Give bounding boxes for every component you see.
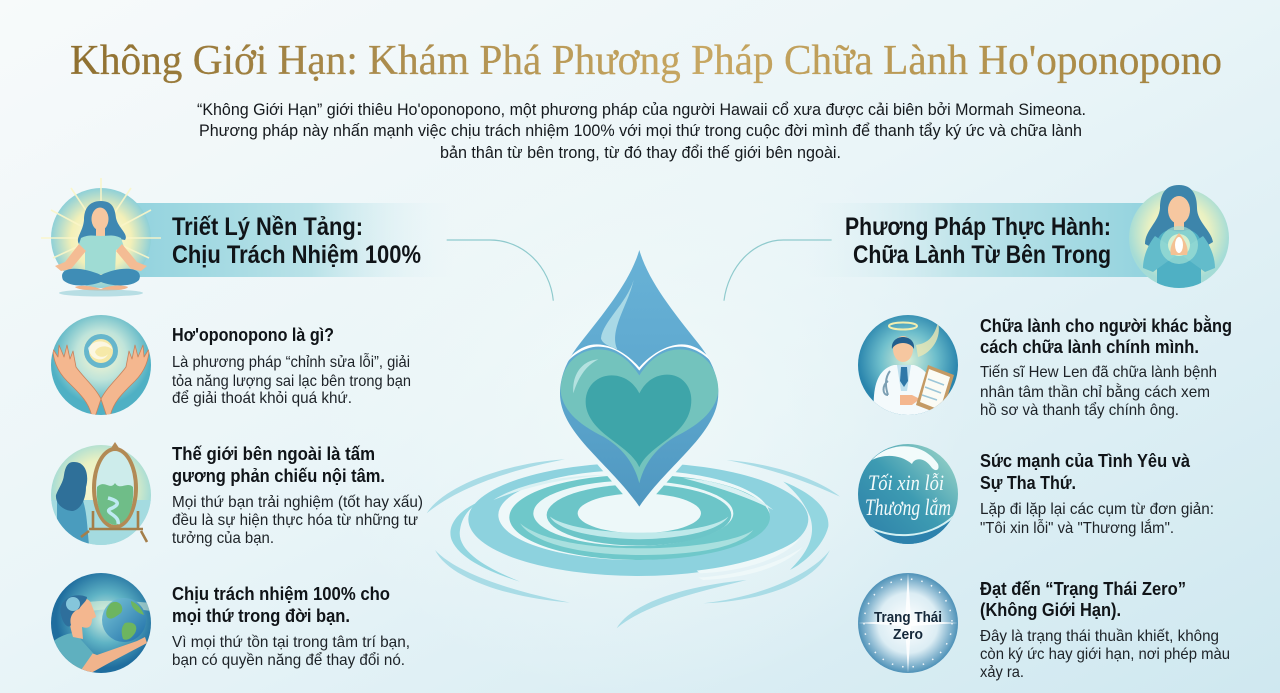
item text: outer world is mirror: đều là sự hiện thực hóa từ những tư xyxy=(172,512,418,529)
intro text xyxy=(197,100,1086,162)
drop highlight xyxy=(601,280,634,349)
right header text: Chữa Lành Từ Bên Trong xyxy=(853,241,1111,269)
left header band xyxy=(135,203,455,277)
item text: healing others: Tiến sĩ Hew Len đã chữa lành bệnh xyxy=(980,364,1217,381)
item text: what is Hooponopono: Là phương pháp “chỉnh sửa lỗi”, giải xyxy=(172,352,410,371)
item text: zero state: xảy ra. xyxy=(980,664,1024,681)
intro text: Phương pháp này nhấn mạnh việc chịu trách nhiệm 100% với mọi thứ trong cuộc đời mình để thanh tẩy ký ức và chữa lành xyxy=(199,121,1082,140)
item text: love and forgiveness: "Tôi xin lỗi" và "Thương lắm". xyxy=(980,518,1174,537)
icon: doctor xyxy=(858,315,958,415)
icon: mirror xyxy=(51,442,151,545)
intro text: “Không Giới Hạn” giới thiêu Ho'oponopono, một phương pháp của người Hawaii cổ xưa được cải biên bởi Mormah Simeona. xyxy=(197,100,1086,119)
item text: love and forgiveness: Sự Tha Thứ. xyxy=(980,473,1076,493)
item text: take full responsibility: mọi thứ trong đời bạn. xyxy=(172,606,350,626)
item text: take full responsibility xyxy=(172,584,410,669)
icon: person holding globe xyxy=(51,573,151,673)
icon: praying woman xyxy=(1129,185,1229,288)
item text: zero state xyxy=(980,579,1230,681)
item text: zero state: còn ký ức hay giới hạn, nơi phép màu xyxy=(980,646,1230,663)
heart inner xyxy=(586,375,691,467)
item text: what is Hooponopono: để giải thoát khỏi quá khứ. xyxy=(172,389,352,407)
intro text: bản thân từ bên trong, từ đó thay đổi thế giới bên ngoài. xyxy=(440,143,841,162)
item text: healing others: hồ sơ và thanh tẩy chính ông. xyxy=(980,401,1179,419)
icon: wave with script phrases xyxy=(858,444,958,544)
item text: love and forgiveness: Sức mạnh của Tình Yêu và xyxy=(980,451,1191,471)
heart outline xyxy=(564,344,715,371)
left header text xyxy=(172,213,421,269)
icon: zero state orb xyxy=(858,573,958,673)
item text: healing others: nhân tâm thần chỉ bằng cách xem xyxy=(980,382,1210,401)
item text: love and forgiveness: Lặp đi lặp lại các cụm từ đơn giản: xyxy=(980,501,1214,518)
break-up of the outer ring at lower right xyxy=(697,538,803,580)
heart highlight xyxy=(573,359,598,393)
item text: healing others: cách chữa lành chính mình. xyxy=(980,337,1199,357)
item text: take full responsibility: Chịu trách nhiệm 100% cho xyxy=(172,584,390,604)
item text: love and forgiveness xyxy=(980,451,1214,537)
item text: healing others xyxy=(980,315,1232,419)
item text: outer world is mirror: Mọi thứ bạn trải nghiệm (tốt hay xấu) xyxy=(172,494,423,511)
right header text xyxy=(845,213,1111,269)
item text: zero state: Đạt đến “Trạng Thái Zero” xyxy=(980,579,1186,599)
left header text: Chịu Trách Nhiệm 100% xyxy=(172,241,421,269)
center illustration: water drop with heart and ripples xyxy=(427,240,840,628)
item text: what is Hooponopono: Hơ'oponopono là gì? xyxy=(172,325,334,345)
item text: healing others: Chữa lành cho người khác bằng xyxy=(980,315,1232,336)
connector arc left xyxy=(447,240,553,301)
halo cutting ripples xyxy=(595,462,685,513)
icon: hands holding orb xyxy=(51,315,151,417)
ripples xyxy=(427,459,840,628)
title: Không Giới Hạn: Khám Phá Phương Pháp Chữa Lành Ho'oponopono xyxy=(70,38,1222,84)
icon: zero state orb: Trạng Thái xyxy=(874,609,942,626)
left header text: Triết Lý Nền Tảng: xyxy=(172,213,363,241)
item text: take full responsibility: Vì mọi thứ tồn tại trong tâm trí bạn, xyxy=(172,634,410,651)
item text: zero state: Đây là trạng thái thuần khiết, không xyxy=(980,628,1219,645)
icon: zero state orb: Zero xyxy=(893,626,923,643)
item text: outer world is mirror xyxy=(172,444,423,547)
right header text: Phương Pháp Thực Hành: xyxy=(845,213,1111,241)
right header band xyxy=(805,203,1150,277)
icon: wave with script phrases: Thương lắm xyxy=(865,495,951,520)
icon: meditating woman xyxy=(41,178,161,296)
item text: zero state: (Không Giới Hạn). xyxy=(980,600,1121,620)
item text: take full responsibility: bạn có quyền năng để thay đổi nó. xyxy=(172,651,405,669)
item text: outer world is mirror: Thế giới bên ngoài là tấm xyxy=(172,444,375,464)
water drop xyxy=(560,250,718,507)
icon: wave with script phrases: Tối xin lỗi xyxy=(868,470,944,495)
connector arc right xyxy=(724,240,832,301)
item text: outer world is mirror: tưởng của bạn. xyxy=(172,530,274,547)
item text: outer world is mirror: gương phản chiếu nội tâm. xyxy=(172,466,385,486)
item text: what is Hooponopono: tỏa năng lượng sai lạc bên trong bạn xyxy=(172,373,411,390)
heart outer xyxy=(561,349,718,483)
item text: what is Hooponopono xyxy=(172,325,411,407)
